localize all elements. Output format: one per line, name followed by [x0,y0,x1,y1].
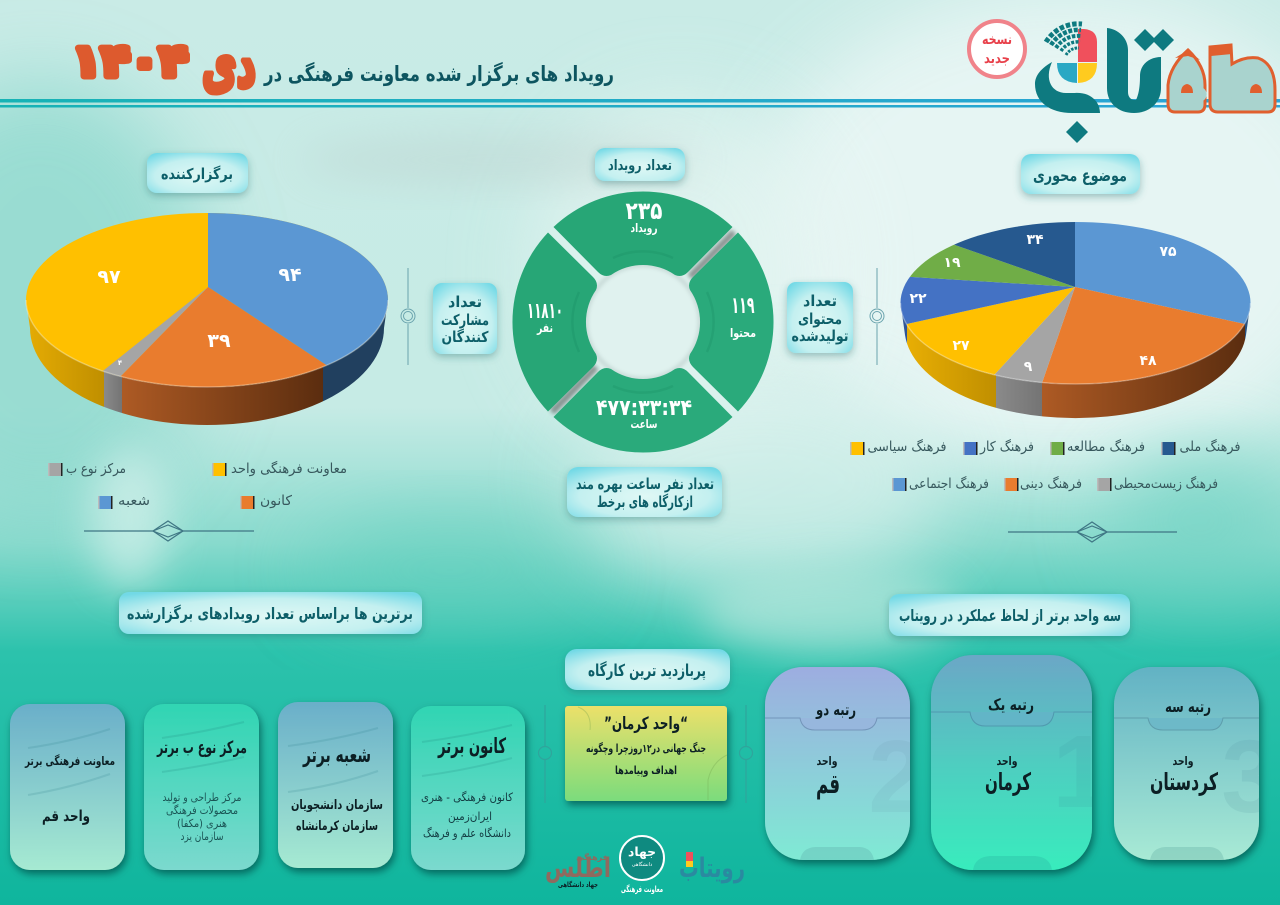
pill: top by events heading [119,592,422,634]
pill: events count heading: تعداد رویداد [608,158,672,174]
legend item: national: فرهنگ ملی [1180,439,1240,455]
card: top type B center: مرکز نوع ب برتر [156,738,247,758]
pill: organizer heading [147,153,248,193]
logo: new version badge: نسخه [982,32,1012,48]
card: most viewed workshop: “واحد کرمان” [604,714,688,734]
value: participants: ۱۱۸۱۰ [527,299,563,324]
rank card: third [1114,667,1279,860]
value: events [626,197,662,236]
rank card: second: واحد [816,754,838,769]
card: top deputy [10,704,125,870]
pill: content produced: تعداد [803,292,837,310]
footer logo: atlas: جهاد دانشگاهی [558,880,598,889]
connector left [401,268,415,365]
pie labels: ۲۲ [909,291,927,307]
value: content [730,293,756,341]
pill: content produced [787,282,853,353]
pie labels [909,232,1177,375]
logo word [1168,45,1275,115]
logo swoosh and bars [1035,28,1174,143]
card: top branch: شعبه برتر [302,743,371,767]
pill: participants [433,283,497,354]
connector right [870,268,884,365]
pie walls [26,302,388,425]
pie labels: ۴۸ [1139,353,1157,369]
pill: main subject heading [1021,154,1140,194]
value: content: محتوا [730,326,756,341]
value: hours: ۴۷۷:۳۳:۳۴ [596,396,692,421]
card: most viewed workshop: اهداف وپیامدها [615,764,677,777]
segment top [554,191,732,276]
pie chart: subject [900,222,1250,418]
connectors workshop [538,705,752,803]
logo: new version badge [969,21,1025,77]
pie labels: ۳۴ [1026,232,1044,248]
card: most viewed workshop [565,706,727,801]
legend item: center type B [48,461,126,477]
title date [72,28,256,101]
pie labels: ۷۵ [1159,244,1177,260]
rank card: second: 2 [868,719,926,834]
rank card: third: کردستان [1150,768,1218,796]
footer logo: rooyetab: رویتاب [679,853,745,884]
legend: subject [850,439,1240,492]
rank card: first: 1 [1052,714,1110,829]
pie labels: ۹ [1024,359,1033,375]
rank card: third: واحد [1172,754,1194,769]
card: top branch [278,702,393,868]
segment left [512,232,597,412]
legend item: religious: فرهنگ دینی [1020,476,1082,492]
pill: content produced: تولیدشده [792,327,848,345]
legend item: political: فرهنگ سیاسی [868,439,946,455]
title [72,28,614,101]
legend item: social: فرهنگ اجتماعی [909,476,989,492]
card: top kanoon: کانون برتر [437,734,506,758]
pie labels: ۲۷ [952,338,970,354]
rank card: first [931,655,1110,870]
card: top kanoon: ایران‌زمین [448,809,492,824]
rank card: third: 3 [1221,719,1279,834]
card: top deputy: واحد قم [42,807,90,825]
pill: main subject heading: موضوع محوری [1033,166,1127,186]
rank card: third: رتبه سه [1165,697,1211,716]
card: top type B center [144,704,259,870]
donut chart: key numbers [512,191,774,453]
card: top deputy: معاونت فرهنگی برتر [24,754,115,769]
header divider lines [0,99,1280,108]
logo dot fan [1046,24,1082,55]
card: top type B center: مرکز طراحی و تولید [162,791,242,804]
logo colored circle [1057,29,1097,83]
pie top [900,222,1250,384]
rank card: first: واحد [996,754,1018,769]
pill: most viewed workshop heading: پربازدید ترین کارگاه [588,660,706,681]
inner arcs shading [572,251,714,393]
pill: participants: تعداد [448,293,482,311]
value: participants [527,299,563,335]
pill: top by events heading: برترین ها براساس تعداد رویدادهای برگزارشده [127,604,413,623]
segment bottom [554,368,732,453]
title date: دی [202,28,256,101]
value: participants: نفر [536,321,553,335]
title text: رویداد های برگزار شده معاونت فرهنگی در [263,61,614,86]
footer logo: atlas: فرهنگی [576,852,608,862]
pie labels [97,264,302,367]
pill: top three units heading: سه واحد برتر از لحاظ عملکرد در رویتاب [899,606,1121,625]
legend item: work: فرهنگ کار [979,439,1034,455]
footer logo: jahad: معاونت فرهنگی [621,884,663,895]
pie labels: ۴ [118,359,123,367]
footer logo: atlas: اطلس [545,853,611,884]
pill: participants: مشارکت [441,311,489,329]
card: top kanoon: کانون فرهنگی - هنری [421,790,513,805]
legend item: environment: فرهنگ زیست‌محیطی [1114,476,1218,492]
rank card: first: رتبه یک [988,695,1034,714]
card: top type B center: سازمان یزد [180,830,224,843]
value: hours [596,396,692,431]
value: hours: ساعت [630,417,658,431]
card: top type B center: هنری (مکفا) [177,817,227,830]
pill: participants: کنندگان [442,328,489,346]
rank card: first: کرمان [985,768,1031,796]
pill: events count heading [595,148,685,181]
legend item: kanoon [240,493,293,509]
title date: ۱۴۰۴ [72,36,188,87]
logo word: ماه [1174,55,1270,115]
value: content: ۱۱۹ [732,293,754,319]
pill: content produced: محتوای [798,310,842,328]
pie labels: ۹۷ [97,266,121,288]
pie labels: ۱۹ [943,255,961,271]
footer logo: jahad: دانشگاهی [632,861,652,868]
logo: new version badge: جدید [984,51,1010,67]
rank card: second: قم [816,769,840,800]
legend: organizer [48,460,347,509]
card: top branch: سازمان کرمانشاه [296,819,378,834]
pie walls [900,305,1250,418]
card: top kanoon [411,706,525,870]
pill: person-hours heading: ازکارگاه های برخط [597,493,693,511]
legend item: branch: شعبه [118,493,150,509]
pill: top three units heading [889,594,1130,636]
legend item: center type B: مرکز نوع ب [66,461,126,477]
pill: person-hours heading: تعداد نفر ساعت بهره مند [576,475,714,493]
rank card: second [765,667,926,860]
card: most viewed workshop: جنگ جهانی در۱۲روزچرا وچگونه [586,741,706,755]
pie top [26,213,388,387]
legend item: reading: فرهنگ مطالعه [1067,439,1145,455]
pie labels: ۳۹ [207,330,231,352]
card: top type B center: محصولات فرهنگی [166,804,238,817]
legend item: unit deputy: معاونت فرهنگی واحد [231,460,347,477]
pie labels: ۹۴ [278,264,302,286]
footer logo: jahad: جهاد [628,844,656,859]
logo: mah tab [1035,24,1275,143]
gap shadows [552,232,734,412]
value: events: ۲۳۵ [626,197,662,225]
pill: organizer heading: برگزارکننده [161,165,233,183]
footer logo: jahad [620,836,664,895]
card: top kanoon: دانشگاه علم و فرهنگ [423,826,511,841]
segment right [689,232,774,412]
pill: most viewed workshop heading [565,649,730,690]
pie chart: organizer [25,213,388,425]
legend item: kanoon: کانون [260,493,293,509]
pill: person-hours heading [567,467,722,517]
value: events: رویداد [630,221,658,236]
donut hole [581,260,705,384]
card: top branch: سازمان دانشجویان [291,798,383,813]
rank card: second: رتبه دو [815,700,856,719]
footer logo: atlas [545,852,611,889]
legend item: branch [98,493,150,509]
